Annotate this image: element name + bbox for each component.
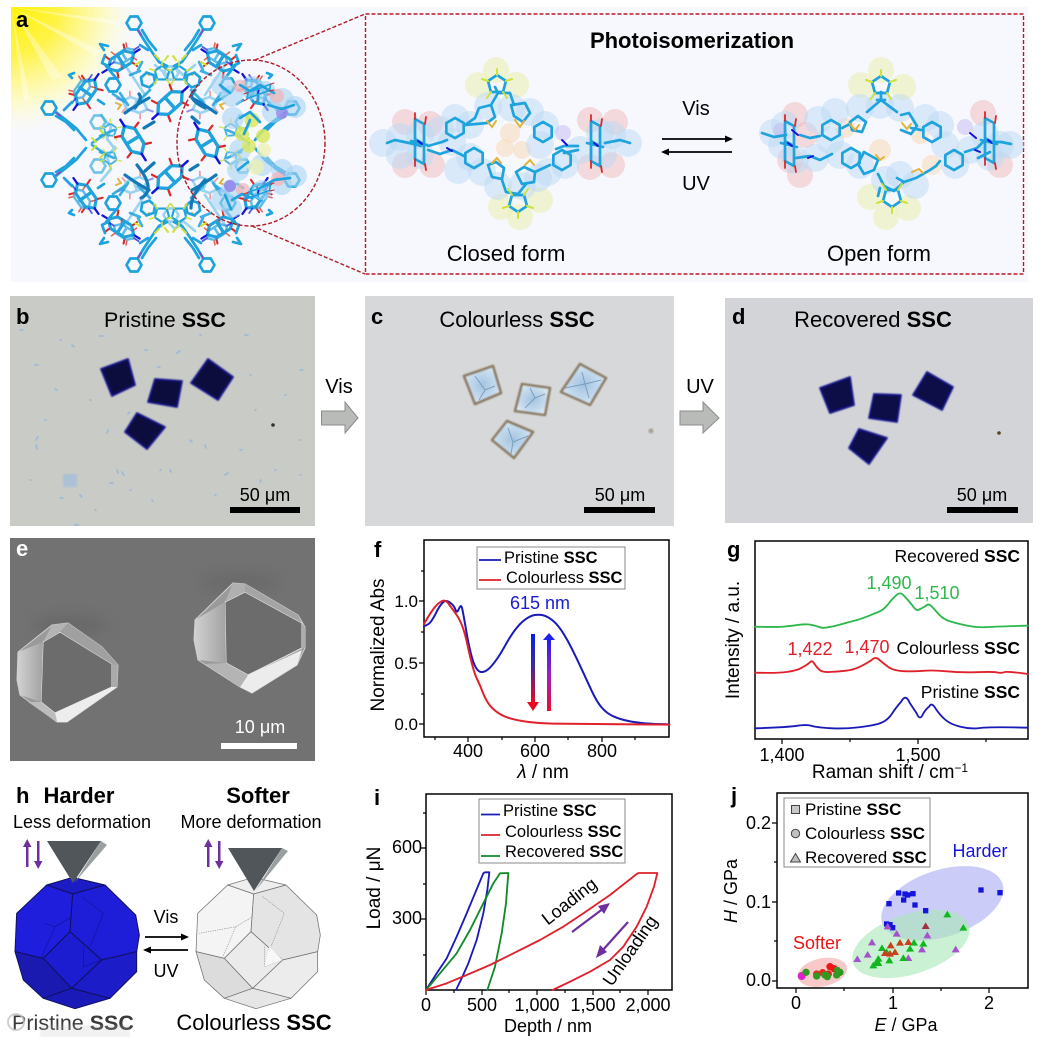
load-depth curves — [426, 872, 657, 990]
peak label: 615 nm — [510, 593, 570, 613]
panel i: load-depth curves — [364, 785, 672, 1036]
scale bar — [230, 485, 300, 513]
axis labels: 1,500 — [895, 745, 941, 765]
panel e: SEM image — [10, 536, 315, 761]
colourless polyhedron crystal — [196, 877, 320, 1009]
panel d: recovered crystals micrograph — [725, 298, 1033, 523]
magnifier circle and zoom lines — [177, 14, 1024, 274]
peak labels: 1,470 — [844, 637, 890, 657]
scale bar — [947, 485, 1018, 513]
left crystal — [17, 623, 118, 722]
panel g: Raman spectra — [723, 537, 1028, 783]
series labels — [895, 546, 1020, 702]
scale bar: 50 μm — [240, 485, 290, 505]
chart frame and ticks — [419, 540, 669, 742]
axis labels: 0.0 — [746, 970, 771, 990]
axis labels: 300 — [392, 908, 422, 928]
Raman curves — [755, 593, 1028, 728]
arrows: Vis / UV: UV — [153, 961, 179, 981]
axis labels: Depth / nm — [504, 1016, 592, 1036]
axis labels: 0 — [791, 993, 801, 1013]
axis labels: 1.0 — [394, 592, 418, 611]
heading: photoisomerization: Photoisomerization — [590, 28, 794, 53]
label f: f — [374, 537, 382, 562]
axis labels — [364, 837, 671, 1036]
recovered triangles: overlaid red — [922, 922, 930, 929]
annotation: softer: Softer — [793, 933, 841, 953]
axis labels: 0.1 — [746, 892, 771, 912]
dark blue crystals — [101, 359, 233, 449]
peak labels: 1,490 — [866, 573, 912, 593]
arrows: Vis / UV equilibrium: UV — [682, 173, 711, 195]
label d: d — [732, 304, 745, 329]
legend: Colourless SSC — [805, 824, 925, 843]
scatter plot — [795, 852, 1013, 991]
panel f: absorption spectra — [368, 537, 669, 783]
legend: Colourless SSC — [506, 569, 623, 587]
legend: Recovered SSC — [805, 848, 927, 867]
axis labels: 0.0 — [394, 715, 418, 734]
axis labels: 0 — [421, 995, 431, 1015]
colourless circles — [798, 963, 844, 980]
axis labels: 500 — [467, 995, 497, 1015]
label c: c — [371, 304, 383, 329]
legend — [784, 798, 930, 867]
dark blue crystals — [820, 372, 953, 464]
text: less deformation: Less deformation — [13, 812, 151, 832]
axis labels: Intensity / a.u. — [723, 581, 744, 699]
recovered triangles: green — [869, 911, 967, 968]
panel a: framework and photoisomerization — [11, 7, 1028, 282]
peak labels: 1,510 — [914, 583, 960, 603]
arrow: UV: UV — [686, 376, 715, 398]
axis labels — [723, 581, 968, 783]
axis labels: 1,500 — [570, 995, 616, 1015]
scale bar — [584, 485, 655, 513]
arrows: Vis / UV — [143, 907, 189, 981]
scale bar: 50 μm — [595, 485, 645, 505]
legend: Pristine SSC — [805, 800, 901, 819]
gradient arrows — [527, 633, 555, 711]
label b: b — [16, 304, 29, 329]
annotation: harder: Harder — [952, 841, 1008, 861]
indenter tip (colourless crystal) — [228, 848, 288, 891]
peak labels — [787, 573, 960, 659]
panel b: pristine crystals micrograph — [10, 296, 315, 526]
axis labels: Normalized Abs — [368, 578, 389, 712]
arrows: Vis / UV equilibrium — [661, 98, 733, 195]
legend: Pristine SSC — [504, 549, 598, 567]
label: colourless SSC: Colourless SSC — [176, 1010, 332, 1035]
axis labels: E / GPa — [874, 1015, 939, 1035]
indenter tip (blue crystal) — [47, 841, 107, 883]
heading: softer: Softer — [226, 783, 290, 808]
label: pristine SSC with watermark: Pristine SSC — [12, 1011, 134, 1035]
blue polyhedron crystal — [15, 877, 139, 1009]
heading: harder: Harder — [44, 783, 115, 808]
recovered triangles: purple — [853, 923, 960, 962]
scale bar — [221, 717, 297, 749]
axis labels: 2 — [984, 993, 994, 1013]
label i: i — [374, 785, 380, 810]
axis labels — [368, 578, 617, 783]
chart frame and ticks — [772, 793, 1028, 993]
title: Pristine SSC — [104, 308, 226, 332]
axis labels: 0.2 — [746, 813, 771, 833]
series labels: Pristine SSC — [921, 682, 1020, 702]
axis labels: 1,000 — [514, 995, 560, 1015]
metal-organic framework structure — [42, 16, 300, 272]
loading annotation: Loading — [538, 874, 601, 929]
right crystal — [194, 583, 305, 693]
series labels: Recovered SSC — [895, 546, 1020, 566]
legend: Colourless SSC — [505, 823, 622, 841]
axis labels: Load / μN — [364, 847, 385, 929]
peak labels: 1,422 — [787, 639, 833, 659]
axis labels: −1 — [954, 761, 968, 775]
panel a background — [11, 7, 1028, 282]
legend: Pristine SSC — [503, 802, 597, 820]
molecule: closed form — [369, 57, 642, 230]
label g: g — [727, 537, 740, 562]
legend: Recovered SSC — [505, 843, 623, 861]
axis labels — [721, 813, 994, 1035]
axis labels: 400 — [453, 741, 483, 761]
molecule: open form — [759, 57, 1024, 230]
inner naphthalene units — [109, 77, 231, 208]
surface specks — [20, 330, 303, 525]
text: more deformation: More deformation — [180, 812, 322, 832]
arrow: UV — [680, 376, 719, 433]
title: Recovered SSC — [794, 307, 952, 332]
axis labels: 800 — [587, 741, 617, 761]
legend — [477, 547, 625, 589]
scale bar: 10 μm — [235, 717, 285, 737]
label j: j — [730, 783, 737, 808]
axis labels: 1 — [888, 993, 898, 1013]
title: Colourless SSC — [439, 307, 595, 332]
arrow: Vis — [322, 376, 358, 433]
panel j: hardness vs modulus scatter — [721, 783, 1028, 1035]
label e: e — [16, 536, 28, 561]
arrows: Vis / UV equilibrium: Vis — [682, 98, 710, 120]
axis labels: H / GPa — [721, 858, 741, 923]
caption: open form: Open form — [827, 241, 931, 266]
label h: h — [16, 783, 29, 808]
arrow: Vis: Vis — [325, 376, 353, 398]
axis labels: 2,000 — [625, 995, 671, 1015]
region ellipses — [795, 852, 1013, 991]
chart frame and ticks — [755, 541, 1028, 744]
axis labels: Raman shift / cm — [812, 762, 954, 783]
transparent crystals — [464, 364, 606, 458]
scale bar: 50 μm — [957, 485, 1007, 505]
arrows: Vis / UV: Vis — [154, 907, 178, 927]
legend — [479, 799, 625, 863]
axis labels: 1,400 — [759, 745, 805, 765]
axis labels: 600 — [392, 837, 422, 857]
purple arrows — [23, 839, 224, 869]
axis labels: 0.5 — [394, 654, 418, 673]
space-filling highlight in magnified circle — [211, 74, 307, 218]
chart frame and ticks — [421, 794, 672, 995]
unloading annotation: Unloading — [599, 912, 662, 989]
axis labels: λ / nm — [516, 762, 569, 783]
pristine squares — [884, 887, 1003, 930]
absorption curves — [424, 601, 669, 725]
panel c: colourless crystals micrograph — [365, 296, 674, 526]
axis labels: 600 — [520, 741, 550, 761]
panel h: nanoindentation schematic — [4, 783, 332, 1042]
caption: closed form: Closed form — [447, 241, 565, 266]
label a: a — [16, 7, 29, 32]
icon: sunlight rays — [11, 7, 141, 132]
series labels: Colourless SSC — [896, 638, 1020, 658]
